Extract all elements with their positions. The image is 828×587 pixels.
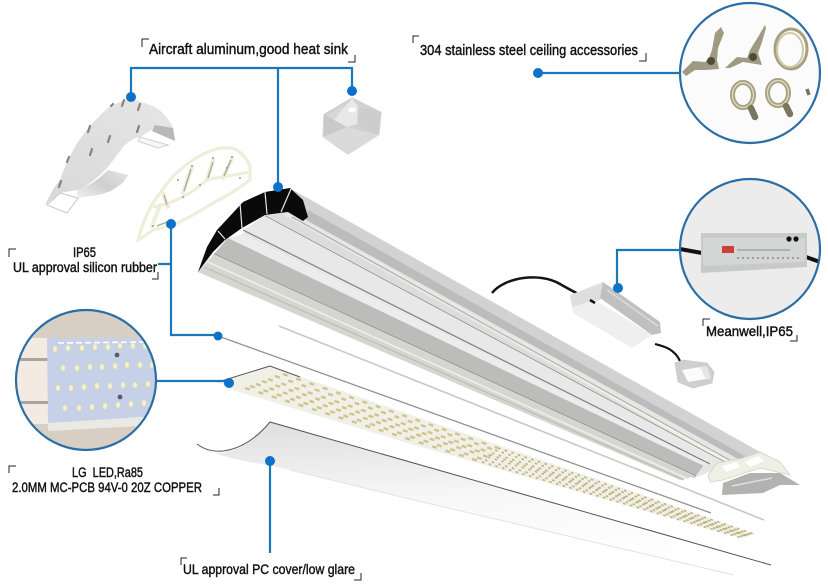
label: silicon rubber [9,245,158,279]
label: Meanwell: Meanwell,IP65 [706,323,793,339]
connector: accessories [533,68,681,78]
label: silicon rubber: UL approval silicon rubber [13,260,157,275]
callout circle: LED board [16,310,157,450]
label: stainless steel accessories [413,36,646,61]
right end cap assembly [708,452,800,495]
brackets [682,27,724,76]
silicone rubber gasket [138,148,250,240]
label: LG LED: 2.0MM MC-PCB 94V-0 20Z COPPER [12,480,202,495]
callout circle: driver [680,179,820,319]
eye bolts [732,80,788,108]
LED rows [245,374,498,462]
small mounting clip [675,360,714,388]
mounting slots [59,100,140,187]
driver box with cable [492,277,714,388]
connector: silicon rubber [158,219,222,340]
connector: LED board [156,378,234,388]
connector lines: aircraft aluminum [131,68,352,187]
connector: driver [613,250,681,293]
LED circuit board strip [218,366,756,538]
diffuser PC cover [197,422,771,575]
label: LG LED: LG LED,Ra85 [72,465,143,480]
connector dots: aircraft aluminum [126,86,357,192]
silicone gasket rod lower [218,336,711,513]
wire ring [775,29,807,69]
label: PC cover: UL approval PC cover/low glare [183,561,355,577]
heat sink aluminium body [198,190,760,480]
heat sink black end profile [198,188,308,272]
left end plate [45,98,175,213]
label: silicon rubber: IP65 [73,245,96,260]
connector: PC cover [265,456,275,553]
label: aircraft aluminum [142,39,355,62]
callout circle: ceiling accessories [680,3,820,143]
label: PC cover [181,558,361,580]
end cube connector [323,98,381,154]
label: aircraft aluminum: Aircraft aluminum,good heat sink [149,41,348,58]
label: stainless steel accessories: 304 stainless steel ceiling accessories [420,43,638,59]
label: LG LED [9,465,219,495]
label: Meanwell [703,319,797,341]
silicone gasket rod upper [279,326,764,520]
LEDs [53,343,154,411]
